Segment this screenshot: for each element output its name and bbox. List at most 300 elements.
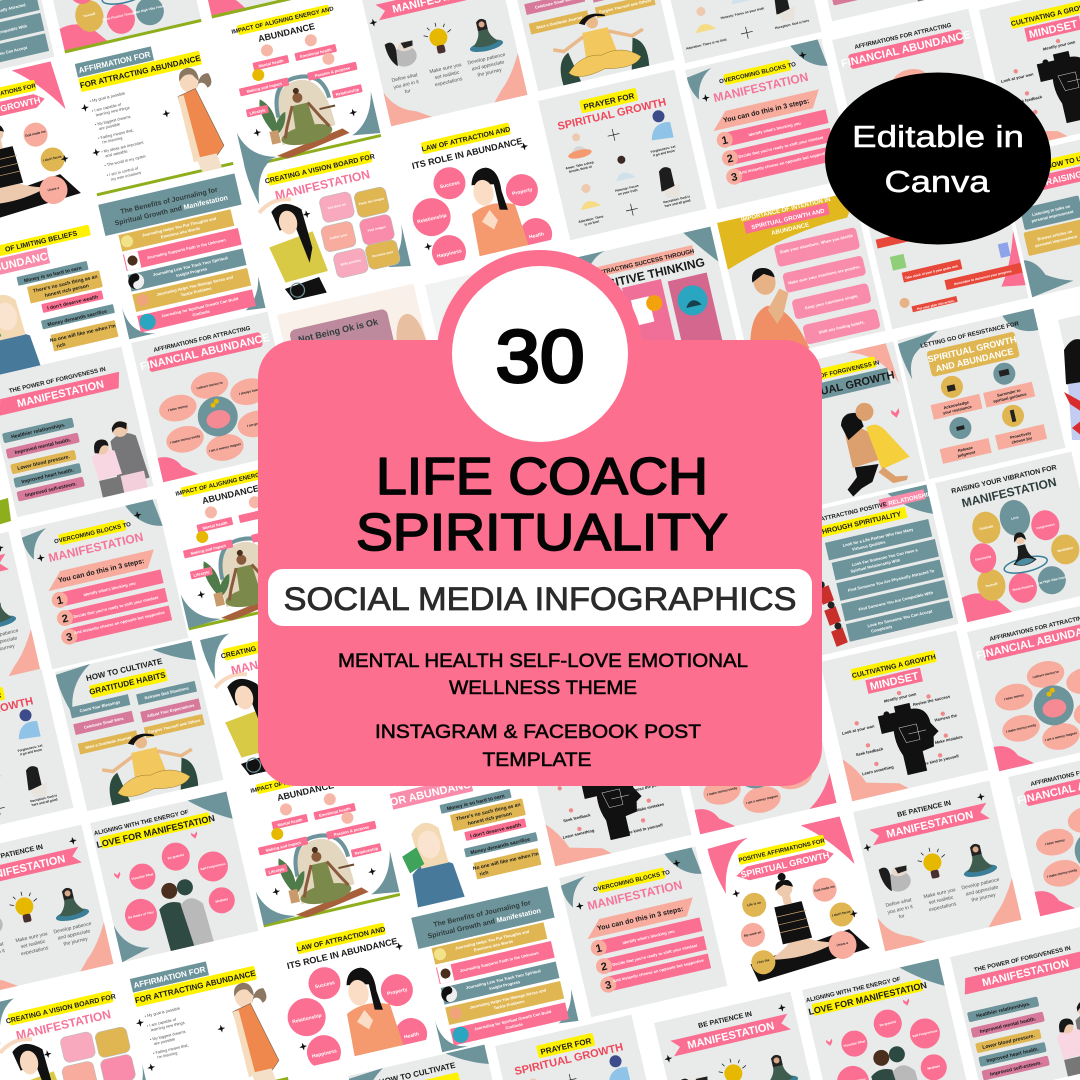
card: law of attraction: Success (439, 180, 461, 190)
card: law of attraction: LAW OF ATTRACTION AND (421, 126, 511, 153)
card: overcoming blocks, bottom: Decide that you're ready to shift your mindset (612, 943, 698, 967)
card: love for manifestation: ALIGNING WITH THE ENERGY OF (94, 810, 190, 837)
card: benefits of journaling, bottom: Journaling Helps You Put Thoughts and (455, 929, 530, 951)
card: vision board: MANIFESTATION (274, 167, 371, 203)
card: be patience, lower right: Make sure you (923, 887, 956, 900)
card: impact of aligning energy: ABUNDANCE (257, 21, 316, 44)
card: gratitude habits, top row: Start a Gratitude Journal (536, 15, 583, 30)
card: prayer, left edge: Forgiveness: Let (17, 743, 44, 753)
card: vision board: Gather your (329, 232, 349, 241)
number badge: 30 (452, 266, 628, 442)
card: prayer, bottom (495, 1015, 664, 1080)
card: love for manifestation, bottom: Visualize What (843, 1039, 867, 1048)
card: raising vibration, top edge: Yourself (83, 11, 97, 18)
card: prayer for spiritual growth: Adoration: There (578, 214, 604, 224)
card: affirmation for attracting abundance (67, 34, 234, 196)
card: raising your vibration (935, 452, 1080, 622)
card: prayer for spiritual growth: PRAYER FOR (583, 91, 635, 112)
card: benefits of journaling, bottom: Emotions into Words (473, 938, 514, 953)
card: attracting positive relationships: Look for a Life Partner Who Has Many (842, 527, 915, 548)
card: law of attraction, bottom: Success (314, 980, 336, 990)
card: impact, lower: Mental health (277, 817, 304, 828)
subtitle bar: SOCIAL MEDIA INFOGRAPHICS (284, 581, 796, 617)
card: limiting beliefs: No one will like me when I'm (49, 323, 117, 344)
template text (375, 722, 701, 771)
card: affirmation for attracting abundance: learning new things (95, 105, 130, 117)
card: letting go of resistance: AND ABUNDANCE (935, 346, 1014, 374)
card: vision board: Paste the images (358, 196, 385, 206)
card: be patience, lower right: Define what (885, 897, 913, 909)
card: growth mindset, lower middle: Make mistakes (636, 801, 665, 813)
card: benefits of journaling: Spiritual Growth and Manifestation (114, 195, 229, 227)
card: be patience, lower right: BE PATIENCE IN (897, 800, 952, 819)
card: overcoming blocks, bottom: 2 (600, 961, 609, 974)
card: raising vibration, top edge (33, 0, 202, 53)
card: overcoming blocks: 1 (721, 134, 729, 147)
card: financial abundance, right (967, 601, 1080, 771)
card: gratitude habits, left: Count Your Blessings (79, 699, 121, 713)
card: overcoming blocks, left: You can do this in 3 steps: (58, 558, 145, 585)
card: be patience, bottom: BE PATIENCE IN (698, 1011, 753, 1030)
card: power of forgiveness, bottom right: Lower blood pressure. (982, 1033, 1036, 1051)
card: prayer, bottom: SPIRITUAL GROWTH (514, 1041, 624, 1078)
card: gratitude habits, left: Forgive Yourself and Others (148, 717, 202, 735)
card: benefits of journaling, bottom: Gratitude (505, 1021, 524, 1030)
card: be patience, lower right: you are in it (887, 904, 914, 916)
card: raising vibration, top edge: Eat High Vibe Food (135, 4, 164, 14)
card: financial abundance, lower right: I have money (1045, 838, 1065, 846)
card: raising your vibration: RAISING YOUR VIBRATION FOR (951, 464, 1057, 495)
card: be patience, left (0, 532, 41, 702)
card: benefits of journaling, bottom: Journaling Supports Faith in the Unknown (459, 950, 540, 973)
card: raising your vibration: Eat High Vibe Food (1037, 575, 1067, 585)
card: importance of intention: Keep your intentions simple. (804, 293, 859, 310)
card: love for manifestation, bottom: Self-Forgiveness (912, 1029, 938, 1038)
card: red goal-setting labels: Take stock of your 5 year goals and (905, 264, 958, 280)
card: limiting beliefs, lower: FOR ABUNDANCE (382, 777, 479, 810)
card: letting go of resistance: spiritual guidance (993, 391, 1028, 404)
card: power of forgiveness: Healthier relationships. (11, 422, 67, 441)
card: law of attraction, bottom (271, 918, 430, 1076)
card: financial abundance left: I attract money to (196, 380, 223, 390)
card: growth mindset top right: Identify your own (1042, 39, 1076, 52)
card: letting go of resistance: your resistance (942, 404, 973, 416)
card: prayer for spiritual growth: is no limit (584, 219, 600, 227)
card: power of forgiveness: THE POWER OF FORGIVENESS IN (9, 367, 106, 395)
card: power of forgiveness: Lower blood pressure. (17, 454, 71, 472)
card: power of forgiveness, bottom right: Improved self-esteem. (989, 1060, 1043, 1078)
card: overcoming blocks, bottom: 1 (595, 942, 603, 955)
card: impact of aligning energy: Making and impact (246, 81, 283, 94)
card: financial abundance top (832, 9, 1001, 179)
card: aligning, right edge with figure (1058, 313, 1080, 447)
card: law of attraction, bottom: LAW OF ATTRACTION AND (296, 926, 386, 953)
card: love for manifestation: Self-Forgiveness (200, 862, 226, 871)
card: limiting beliefs, lower (379, 751, 547, 910)
card: limiting beliefs: There's no such thing as an (33, 274, 98, 295)
card: limiting beliefs: Money demands sacrifice (47, 309, 108, 328)
card: top edge fragment with green rule (180, 0, 349, 18)
card: financial abundance left: I make money easily (170, 434, 201, 445)
card: forgiveness for spiritual growth: THE POWER OF FORGIVENESS IN (782, 360, 880, 388)
card: financial abundance, right: I have money (1004, 693, 1024, 701)
card: affirmation for attracting abundance: • I am in control of (106, 165, 139, 178)
card: be patience, lower right: the journey (971, 892, 997, 904)
card: affirmation, bottom: • Failing means that, (153, 1043, 189, 1056)
card: affirmation for attracting abundance: FOR ATTRACTING ABUNDANCE (79, 54, 202, 90)
card: benefits of journaling: Journaling Supports Faith in the Unknown (146, 237, 227, 260)
card: cultivating a growth mindset: Look at your own (841, 723, 875, 736)
card: benefits of journaling, bottom: Journaling Lets You Track Your Spiritual (465, 968, 541, 990)
card: be patience, lower left: expectations (20, 945, 50, 957)
card: be patience, lower left: the journey (63, 936, 89, 948)
card: forgiveness for spiritual growth: It helps you (779, 422, 802, 432)
card: limiting beliefs, lower: I don't deserve wealth (470, 822, 522, 840)
card: law of attraction, bottom: ITS ROLE IN ABUNDANCE (286, 936, 398, 971)
title: life coach spirituality (356, 448, 728, 562)
card: financial abundance, lower right (1008, 746, 1080, 916)
card: limiting beliefs, lower: Money is so hard to earn (447, 793, 505, 812)
card: prayer for spiritual growth: Reception: God is (663, 194, 691, 204)
card: attracting positive relationships: Completely (871, 624, 894, 634)
card: power of forgiveness: MANIFESTATION (16, 379, 105, 410)
badge: editable in canva: Editable in (852, 119, 1024, 154)
card: gratitude habits, left: Celebrate Small Wins (83, 716, 125, 730)
card: attracting success through positive thinking: ATTRACTING SUCCESS THROUGH (595, 249, 695, 277)
card: power of forgiveness (0, 347, 154, 518)
card: love for manifestation: Be Aware of Your (128, 910, 155, 920)
card: growth mindset top right: Seek feedback (1014, 94, 1043, 105)
card: vision board: CREATING A VISION BOARD FOR (264, 153, 376, 186)
card: prayer, left edge: it go and know (20, 747, 43, 756)
card: raising your vibration: MANIFESTATION (960, 475, 1058, 510)
card: affirmation for attracting abundance: • My goal is possible (89, 90, 126, 104)
number badge: 30: 30 (496, 315, 584, 398)
card: prayer, left edge: here and all good (31, 797, 58, 807)
card: cultivating a growth mindset: MINDSET (869, 670, 920, 693)
card: red goal-setting labels: Remember to document your progress (954, 269, 1012, 286)
card: letting go of resistance: Surrender to (996, 387, 1022, 398)
card: growth mindset, lower middle: Be kind to yourself (627, 822, 664, 835)
card: impact of aligning energy: Relationship (335, 87, 360, 97)
card: financial abundance left: I always have (239, 387, 260, 396)
card: not being ok is ok: Not Being Ok is Ok (297, 316, 380, 345)
card: red goal-setting labels: Put your plan into action. (917, 299, 955, 311)
card: cultivating a growth mindset: Harness the (934, 712, 958, 723)
card: growth mindset, lower middle (523, 696, 692, 866)
card: letting go of resistance (897, 309, 1066, 479)
card: benefits of journaling: The Benefits of Journaling for (120, 187, 219, 216)
card: benefits of journaling: Tackle Problems (180, 285, 213, 298)
card: benefits of journaling, bottom: Tackle Problems (493, 998, 526, 1011)
card: impact, lower: IMPACT OF ALIGNING ENERGY AND (250, 765, 354, 795)
card: relationships list, top-left corner (0, 0, 55, 88)
card: financial abundance, lower middle: I make money easily (707, 786, 738, 797)
card: how to use raising your: Listening to talks on (1032, 203, 1071, 217)
card: cultivating a growth mindset: CULTIVATING A GROWTH (851, 654, 937, 680)
card: affirmation for attracting abundance: are possible (98, 121, 121, 131)
card: vision board: Write positive (340, 258, 361, 267)
card: benefits of journaling, bottom: Insight Progress (489, 979, 521, 991)
card: cultivating a growth mindset: Make mistakes (934, 734, 964, 745)
card: affirmation, bottom: are possible (153, 1036, 176, 1046)
card: law of attraction: Health (528, 231, 545, 241)
card: limiting beliefs: I don't deserve wealth (47, 294, 99, 312)
card: overcoming blocks, bottom: Identify what's blocking you (622, 928, 676, 945)
card: cultivating a growth mindset: Be kind to yourself (923, 753, 960, 766)
card: overcoming blocks, left: And instantly choose an opposite but supportive (74, 609, 166, 635)
card: gratitude habits, left: HOW TO CULTIVATE (85, 657, 164, 683)
card: financial abundance, right: I am a money magnet (1045, 731, 1078, 742)
card: love for manifestation: LOVE FOR MANIFESTATION (95, 813, 216, 850)
card: law of attraction (396, 118, 555, 276)
card: love for manifestation, bottom: ALIGNING WITH THE ENERGY OF (806, 977, 902, 1004)
card: benefits of journaling: Insight Progress (176, 266, 208, 278)
card: financial abundance left: AFFIRMATIONS FOR ATTRACTING (153, 326, 251, 354)
card: gratitude habits, left (55, 641, 224, 811)
card: prayer, top row: Honesty: Focus on your truth (720, 6, 765, 20)
card: letting go of resistance: SPIRITUAL GROWTH (927, 334, 1017, 364)
card: prayer, top row: Reception: God is here (775, 18, 810, 30)
card: financial abundance top: AFFIRMATIONS FOR ATTRACTING (854, 23, 952, 51)
card: affirmation for attracting abundance: my own emotions (110, 170, 142, 182)
card: limiting beliefs, lower: honest rich person (467, 811, 513, 827)
card: prayer, top row: Adoration: There is no limit (686, 37, 728, 51)
card: be patience, top row: Make sure you (429, 62, 462, 75)
card: gratitude habits, left: Adjust Your Expectations (147, 702, 195, 718)
card: forgiveness for spiritual growth: It helps (792, 462, 807, 470)
card: attracting positive relationships: Look for Someone You Can Accept (867, 608, 933, 628)
card: raising your vibration: Love (1011, 515, 1019, 521)
card: forgiveness for spiritual growth (757, 342, 926, 512)
card: how to use raising your: personal improvement (1031, 209, 1075, 223)
card: attracting positive relationships: Spiritual Relationship With (850, 557, 901, 574)
card: overcoming blocks, left: 1 (56, 594, 64, 607)
card: financial abundance, lower middle (668, 664, 837, 834)
card: overcoming blocks, left (20, 499, 189, 669)
card: benefits of journaling, bottom: Journaling Helps You Manage Stress and (469, 987, 547, 1010)
card: law of attraction, bottom: Property (387, 987, 408, 997)
card: red goal-setting labels (860, 159, 1029, 329)
card: power of forgiveness, bottom right: THE POWER OF FORGIVENESS IN (974, 946, 1071, 974)
card: limiting beliefs: OF LIMITING BELIEFS (4, 230, 78, 254)
card: attracting success through positive thinking: Meditate (695, 345, 713, 354)
card: limiting beliefs, lower: No one will like me when I'm (472, 851, 540, 872)
card: financial abundance left (131, 312, 300, 482)
card: importance of intention: Shift any limiting beliefs. (818, 319, 865, 335)
card: positive affirmations, left: I don't focus (43, 154, 62, 163)
card: attracting success through positive thinking: POSITIVE THINKING (589, 255, 706, 295)
card: positive affirmations, bottom: I live the (756, 958, 770, 965)
card: overcoming blocks, bottom: OVERCOMING BLOCKS TO (593, 870, 671, 894)
card: forgiveness for spiritual growth: It's like (788, 443, 802, 451)
card: attracting positive relationships: ATTRACTING POSITIVE RELATIONSHIPS (820, 491, 936, 523)
card: overcoming blocks, bottom: MANIFESTATION (586, 878, 684, 913)
card: financial abundance left: I am a money magnet (209, 442, 242, 453)
card: affirmation, bottom: AFFIRMATION FOR (133, 965, 207, 990)
card: benefits of journaling, bottom: Spiritual Growth and Manifestation (427, 908, 542, 940)
card: power of forgiveness, bottom right: MANIFESTATION (981, 958, 1070, 989)
card: limiting beliefs: Money is so hard to earn (24, 265, 82, 284)
card: growth mindset top right: MINDSET (1028, 18, 1079, 41)
card: overcoming blocks: 2 (726, 153, 735, 166)
card: overcoming blocks, left: 2 (61, 613, 70, 626)
panel shape with dome (258, 250, 822, 786)
card: pale blurred sheet (425, 254, 594, 424)
card: vision board, bottom left: MANIFESTATION (15, 1007, 112, 1043)
card: affirmation for attracting abundance: AFFIRMATION FOR (78, 50, 152, 75)
card: letting go of resistance: Proactively (1010, 430, 1032, 440)
card: overcoming blocks: MANIFESTATION (712, 70, 810, 105)
template text: TEMPLATE (482, 750, 592, 771)
card: law of attraction: Property (512, 187, 533, 197)
card: raising your vibration: Generosity (975, 554, 992, 562)
card: impact of aligning energy: Passion & purpose (314, 65, 351, 78)
icon: green fragment at left edge (0, 498, 11, 526)
card: raising your vibration: Forgiveness (1036, 522, 1055, 530)
card: love for manifestation, bottom: LOVE FOR MANIFESTATION (807, 980, 928, 1017)
card: impact of aligning energy (213, 0, 381, 168)
card: power of forgiveness: Improved heart health. (21, 467, 75, 485)
card: impact, lower: Lifestyle (268, 866, 286, 875)
card: power of forgiveness: Improved mental health. (14, 437, 72, 456)
card: be patience, lower left: Develop patience (53, 921, 92, 935)
card: benefits of journaling, bottom: The Benefits of Journaling for (433, 900, 532, 929)
card: prayer for spiritual growth: SPIRITUAL GROWTH (557, 96, 667, 133)
card: attracting positive relationships: THROUGH SPIRITUALITY (817, 511, 902, 537)
card: impact, lower: Emotional health (319, 806, 352, 818)
card: attracting positive relationships (790, 483, 965, 655)
card: positive affirmations, bottom: My work on (744, 930, 762, 938)
card: be patience, top row: and appreciate (471, 59, 505, 73)
card: affirmation for attracting abundance: • Failing means that, (98, 128, 134, 141)
card: be patience, top row: Develop patience (467, 52, 506, 66)
card: vision board: Decorate your (372, 250, 394, 258)
card: gratitude habits, bottom (348, 1045, 517, 1080)
card: be patience, lower left (0, 825, 114, 995)
card: attracting positive relationships: Find Someone You Are Physically Attracted To (847, 568, 935, 593)
card: growth mindset, lower middle: Seek feedback (563, 812, 592, 823)
card: be patience, top row: Define what (391, 72, 419, 84)
card: affirmation for attracting abundance: and valuable (105, 148, 129, 158)
card: financial abundance left: I am grateful (247, 420, 266, 428)
card: impact, left: Mental health (202, 520, 229, 531)
card: love for manifestation (90, 792, 259, 962)
card: be patience, lower left: and appreciate (57, 928, 91, 942)
card: affirmation for attracting abundance: • My ideas are important (101, 139, 145, 154)
card: love for manifestation: Meditate (215, 897, 229, 904)
card: importance of intention: IMPORTANCE OF INTENTION IN (741, 197, 831, 223)
card: cultivating a growth mindset (820, 631, 989, 801)
card: cultivating a growth mindset: Identify your own (883, 691, 917, 704)
card: vision board, behind panel: MANIFESTATION (230, 642, 327, 678)
card: raising your vibration: Gratitude (979, 524, 994, 531)
card: power of forgiveness: Improved self-esteem. (24, 481, 78, 499)
card: overcoming blocks: Decide that you're ready to shift your mindset (738, 135, 824, 159)
card: positive affirmations, bottom: POSITIVE AFFIRMATIONS FOR (738, 838, 826, 864)
card: growth mindset, lower middle: Harness the power (628, 781, 664, 794)
card: overcoming blocks: 3 (730, 171, 739, 184)
card: be patience, lower left: set realistic (20, 939, 46, 950)
card: be patience, top row: expectations (434, 76, 464, 88)
card: cultivating a growth mindset: Seek feedback (855, 746, 884, 757)
card: impact, left: Making and impact (190, 543, 227, 556)
card: impact of aligning energy: Mental health (258, 58, 285, 69)
card: law of attraction: Relationship (417, 213, 447, 225)
card: raising your vibration: Yourself (985, 581, 999, 588)
card: financial abundance, right: I attract money to (1032, 669, 1059, 679)
card: how to use raising your: personal improvement (1035, 234, 1078, 248)
card: financial abundance, right: I make money easily (1006, 723, 1037, 734)
card: impact, left: ABUNDANCE (201, 483, 260, 506)
card: vision board, behind panel (200, 609, 369, 779)
card: power of forgiveness, top row (800, 0, 969, 22)
card: prayer for spiritual growth (538, 70, 707, 240)
card: be patience, lower left: Make sure you (15, 931, 48, 944)
card: benefits of journaling (98, 173, 266, 339)
card: prayer, left edge: Reception: God is (30, 793, 58, 803)
title: life coach spirituality: LIFE COACH (376, 448, 708, 506)
card: love for manifestation, bottom: Meditate (927, 1064, 941, 1071)
card: be patience, top row: the journey (477, 67, 503, 79)
card: attracting positive relationships: Look For Someone You Can Have a (851, 547, 919, 567)
card: overcoming blocks, left: OVERCOMING BLOCKS TO (54, 522, 132, 546)
card: importance of intention: Make sure your intentions are positive. (788, 264, 861, 285)
card: benefits of journaling: Journaling Helps You Manage Stress and (156, 274, 234, 297)
card: positive affirmations, left: I have a (47, 186, 60, 192)
card: law of attraction: ITS ROLE IN ABUNDANCE (411, 136, 523, 171)
card: prayer for spiritual growth: breath, think of (569, 164, 593, 174)
card: love for manifestation, bottom: Be grateful (879, 1020, 896, 1027)
card: impact, left: Lifestyle (193, 569, 211, 578)
card: overcoming blocks: OVERCOMING BLOCKS TO (719, 62, 797, 86)
card: overcoming blocks, bottom: And instantly choose an opposite but supportive (613, 957, 705, 983)
card: vision board, behind panel: CREATING A VISION BOARD FOR (220, 628, 332, 661)
card: benefits of journaling: Journaling Lets You Track Your Spiritual (152, 255, 228, 277)
subtitle bar (268, 569, 812, 626)
card: impact, lower: ABUNDANCE (276, 780, 335, 803)
card: vision board, bottom left: CREATING A VISION BOARD FOR (5, 993, 117, 1026)
card: financial abundance top: FINANCIAL ABUNDANCE (840, 29, 972, 70)
card: affirmation, bottom: • My goal is possible (144, 1005, 181, 1019)
card: forgiveness for spiritual growth: SPIRITUAL GROWTH (785, 369, 896, 406)
card: affirmation, bottom: • My biggest dreams (149, 1029, 186, 1042)
card: impact, lower: Making and impact (265, 840, 302, 853)
badge: editable in canva (825, 72, 1051, 244)
card: benefits of journaling, bottom (411, 886, 579, 1052)
card: prayer for spiritual growth: it go and know (653, 148, 676, 157)
card: law of attraction, bottom: Relationship (292, 1013, 322, 1025)
card: benefits of journaling: Journaling for Spiritual Growth Can Build (161, 296, 239, 318)
card: impact of aligning energy: Emotional health (300, 47, 333, 59)
card: benefits of journaling, bottom: Journaling for Spiritual Growth Can Build (474, 1009, 552, 1031)
card: gratitude habits, left: GRATITUDE HABITS (88, 670, 167, 697)
card: vision board, bottom left (0, 974, 154, 1080)
card: law of attraction, bottom: Happiness (311, 1048, 338, 1060)
card: impact, lower: Relationship (354, 846, 379, 856)
card: financial abundance left: I have money (168, 404, 188, 412)
card: letting go of resistance: Release (957, 445, 974, 453)
card: prayer for spiritual growth: Forgiveness: Let (650, 144, 677, 154)
card: power of forgiveness, bottom right (950, 926, 1080, 1080)
card: overcoming blocks, bottom: You can do this in 3 steps: (597, 906, 684, 933)
title: life coach spirituality: SPIRITUALITY (356, 504, 728, 562)
card: be patience, top row (359, 0, 528, 126)
card: law of attraction: Happiness (436, 248, 463, 260)
card: be patience, bottom (654, 992, 823, 1080)
card: limiting beliefs: honest rich person (44, 283, 90, 299)
card: benefits of journaling: Journaling Helps You Put Thoughts and (142, 216, 217, 238)
